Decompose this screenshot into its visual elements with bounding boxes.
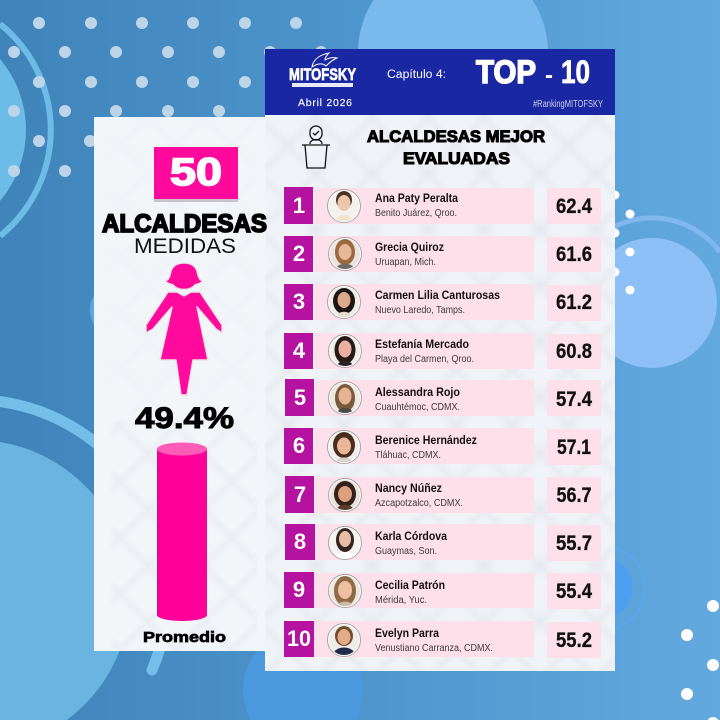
top 10: TOP (476, 54, 536, 90)
row 5: 5 (294, 385, 306, 410)
row 7: 56.7 (556, 484, 592, 507)
hashtag: #RankingMITOFSKY (533, 99, 603, 110)
row 1: Benito Juárez, Qroo. (375, 208, 457, 219)
top 10: 10 (561, 54, 590, 90)
row 2: Grecia Quiroz (375, 240, 444, 254)
panel: left summary (94, 117, 267, 651)
row 8 (285, 524, 601, 561)
row 2: 2 (293, 241, 305, 266)
row 6: Tláhuac, CDMX. (375, 450, 441, 461)
header band (265, 49, 615, 115)
row 6: 57.1 (557, 436, 591, 459)
row 7: Nancy Núñez (375, 481, 442, 495)
row 9: 9 (293, 577, 305, 602)
row 7 (285, 476, 601, 513)
heading: alcaldesas mejor evaluadas (367, 127, 545, 168)
logo: mitofsky: MITOFSKY (289, 65, 357, 84)
row 4: Estefanía Mercado (375, 337, 469, 351)
row 9 (284, 572, 601, 609)
row 5: Alessandra Rojo (375, 385, 460, 399)
percentage: 49.4%: 49.4% (135, 402, 234, 435)
row 10: 10 (287, 626, 311, 651)
row 6 (284, 428, 601, 465)
row 10: Venustiano Carranza, CDMX. (375, 643, 493, 654)
row 2: Uruapan, Mich. (375, 257, 436, 268)
chart: average cylinder (157, 442, 207, 621)
row 9: 55.4 (556, 580, 592, 603)
row 1: 62.4 (556, 195, 592, 218)
row 3 (284, 284, 601, 321)
heading: alcaldesas medidas: ALCALDESAS (102, 210, 267, 238)
row 7: 7 (294, 482, 306, 507)
row 2: 61.6 (556, 243, 592, 266)
heading: alcaldesas medidas: MEDIDAS (134, 235, 236, 258)
row 6: 6 (293, 433, 305, 458)
row 10 (284, 621, 601, 658)
row 3: 61.2 (556, 291, 592, 314)
row 9: Mérida, Yuc. (375, 595, 427, 606)
row 4 (284, 333, 601, 369)
count box: 50: 50 (170, 151, 222, 194)
panel: ranking (265, 49, 615, 671)
row 8: Guaymas, Son. (375, 546, 437, 557)
heading: alcaldesas mejor evaluadas: EVALUADAS (403, 149, 510, 168)
logo: mitofsky (289, 53, 357, 87)
row 10: 55.2 (556, 629, 592, 652)
row 9: Cecilia Patrón (375, 578, 445, 592)
count box: 50 (154, 147, 238, 202)
label: promedio: Promedio (143, 629, 226, 646)
row 6: Berenice Hernández (375, 433, 477, 447)
icon: woman (146, 263, 222, 395)
row 3: Carmen Lilia Canturosas (375, 288, 500, 302)
row 8: 8 (294, 529, 306, 554)
row 5: 57.4 (556, 388, 592, 411)
row 4: 60.8 (556, 340, 592, 363)
date: Abril 2026 (298, 97, 352, 109)
row 4: 4 (293, 338, 306, 363)
row 1: 1 (293, 193, 305, 218)
chapter: Capítulo 4: (387, 69, 446, 81)
row 1: Ana Paty Peralta (375, 191, 458, 205)
row 8: 55.7 (556, 532, 592, 555)
top 10 (476, 54, 590, 90)
top 10: - (545, 62, 553, 89)
icon: podium (302, 126, 330, 168)
heading: alcaldesas medidas (102, 210, 267, 258)
row 1 (284, 187, 601, 224)
row 4: Playa del Carmen, Qroo. (375, 354, 474, 365)
row 8: Karla Córdova (375, 529, 447, 543)
row 3: Nuevo Laredo, Tamps. (375, 305, 465, 316)
row 5 (285, 379, 601, 416)
row 5: Cuauhtémoc, CDMX. (375, 402, 460, 413)
heading: alcaldesas mejor evaluadas: ALCALDESAS MEJOR (367, 127, 545, 146)
row 2 (284, 236, 601, 272)
row 3: 3 (293, 289, 305, 314)
row 7: Azcapotzalco, CDMX. (375, 498, 463, 509)
row 10: Evelyn Parra (375, 626, 439, 640)
